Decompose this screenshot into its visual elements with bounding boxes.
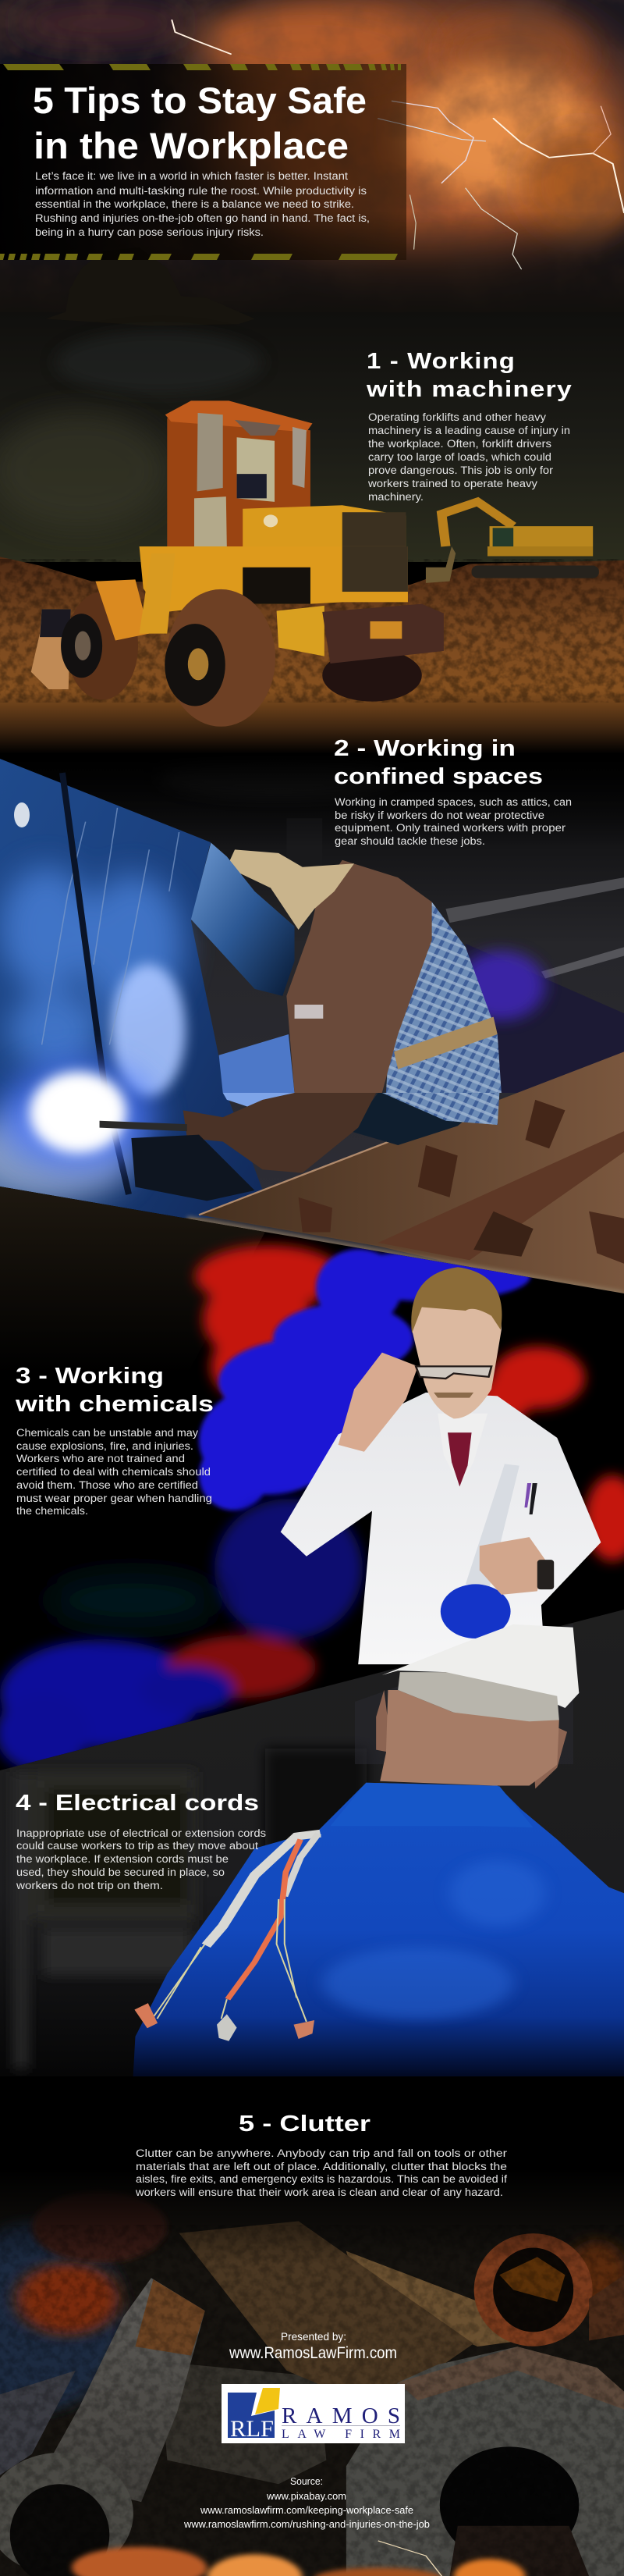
heading: section 3: with chemicals <box>15 1392 214 1417</box>
logo: Ramos Law Firm <box>222 2384 405 2443</box>
metal texture <box>0 2225 624 2576</box>
jacket highlights <box>322 1860 545 2019</box>
intro text: information and multi-tasking rule the roost. While productivity is <box>35 185 367 197</box>
text: section 4: workers do not trip on them. <box>16 1880 163 1891</box>
heading: section 1 <box>366 349 573 402</box>
hat band <box>398 1672 559 1721</box>
intro text <box>35 170 370 238</box>
text: section 1: Operating forklifts and other heavy <box>368 411 546 423</box>
text: section 1: prove dangerous. This job is only for <box>368 464 554 476</box>
panel: electrical background <box>0 1608 624 2123</box>
intro text: being in a hurry can pose serious injury risks. <box>35 226 264 238</box>
illustration: wheel loader <box>31 400 444 727</box>
hazard stripes bottom <box>0 254 398 260</box>
title: in the Workplace <box>34 125 349 166</box>
jacket <box>131 1783 624 2108</box>
text: section 1: carry too large of loads, which could <box>368 451 551 463</box>
dark smoke lower <box>0 1499 363 1772</box>
right big wrench <box>346 2347 624 2576</box>
connectors <box>134 2003 158 2028</box>
panel: intro <box>0 64 406 260</box>
text: section 1: the workplace. Often, forklift drivers <box>368 438 551 450</box>
text: section 1 <box>367 411 570 503</box>
text: section 3: cause explosions, fire, and injuries. <box>16 1440 193 1452</box>
centre handle <box>179 2221 473 2410</box>
hand with flask <box>480 1537 545 1595</box>
background: dark water <box>0 312 624 562</box>
violet wedge and steel parts <box>458 944 624 1093</box>
illustration: excavator <box>426 502 599 583</box>
text: sources <box>183 2475 430 2530</box>
loader body <box>31 546 444 727</box>
watch <box>537 1560 554 1589</box>
flask <box>441 1584 511 1638</box>
panel: black band and workshop background <box>115 777 624 1266</box>
ears <box>376 1690 567 1788</box>
title: 5 Tips to Stay Safe <box>33 80 367 121</box>
ring wrench <box>484 2240 583 2339</box>
text: section 4: the workplace. If extension cords must be <box>16 1853 229 1865</box>
steel plate with smoke <box>0 759 273 1218</box>
illustration: scientist <box>281 1267 601 1664</box>
text: section 4: Inappropriate use of electrical or extension cords <box>16 1827 266 1839</box>
text: section 5: Clutter can be anywhere. Anybody can trip and fall on tools or other <box>136 2147 508 2159</box>
text: section 1: machinery. <box>368 491 424 503</box>
raised arm and hand <box>339 1353 418 1452</box>
edge highlight <box>187 1219 624 1293</box>
welder <box>100 842 502 1201</box>
text: section 2: equipment. Only trained workers with proper <box>335 822 566 834</box>
text: section 5 <box>135 2147 508 2198</box>
panel: wrenches background <box>0 2076 624 2576</box>
thick white cord <box>206 1834 321 1945</box>
text: section 4: could cause workers to trip as they move about <box>16 1840 258 1852</box>
lab coat <box>281 1393 601 1664</box>
text: section 3: must wear proper gear when handling <box>16 1493 212 1504</box>
shirt and tie <box>438 1414 488 1486</box>
icon: lightning bolts <box>172 20 624 269</box>
strap wrench <box>346 2251 511 2347</box>
wires <box>153 1899 307 2022</box>
red smoke <box>195 1245 624 1561</box>
text: section 3: Chemicals can be unstable and may <box>16 1427 198 1439</box>
text: presented by <box>229 2330 397 2362</box>
illustration: ground and soil <box>0 557 624 754</box>
text: section 4: used, they should be secured in place, so <box>16 1866 225 1878</box>
intro text: Rushing and injuries on-the-job often go hand in hand. The fact is, <box>35 212 370 224</box>
text: section 2 <box>335 796 572 847</box>
heading: section 2 <box>334 736 543 789</box>
panel: chemicals background <box>0 1171 624 1795</box>
text: section 1: workers trained to operate heavy <box>367 478 537 489</box>
intro text: essential in the workplace, there is a balance we need to strike. <box>35 198 354 210</box>
icon: island silhouette <box>0 247 263 530</box>
text: presented by: www.RamosLawFirm.com <box>229 2344 397 2362</box>
text: sources: Source: <box>290 2475 323 2487</box>
left wrench <box>40 2278 205 2502</box>
glasses <box>416 1366 491 1379</box>
illustration: welding scene <box>0 759 624 1302</box>
loader cab <box>165 400 406 546</box>
text: section 3: Workers who are not trained and <box>16 1453 185 1464</box>
hazard stripes <box>3 64 401 70</box>
orange clouds <box>72 2547 525 2576</box>
steel beams <box>199 1051 624 1302</box>
lower centre wrench <box>159 2361 326 2484</box>
pens <box>524 1483 531 1507</box>
text: section 5: workers will ensure that their work area is clean and clear of any hazard. <box>135 2186 503 2198</box>
heading: section 4: 4 - Electrical cords <box>16 1791 259 1816</box>
flask neck <box>466 1464 519 1588</box>
heading: section 5: 5 - Clutter <box>239 2112 370 2137</box>
background: storm sky <box>0 0 624 328</box>
intro text: Let’s face it: we live in a world in which faster is better. Instant <box>35 170 348 182</box>
text: section 5: materials that are left out of place. Additionally, clutter that blocks the <box>136 2161 507 2172</box>
heading: section 3: 3 - Working <box>16 1364 164 1389</box>
text: section 2: Working in cramped spaces, such as attics, can <box>335 796 572 808</box>
text: section 4 <box>16 1827 266 1891</box>
logo: Ramos Law Firm: RLF <box>230 2416 274 2442</box>
blue smoke <box>199 1249 530 1510</box>
hard hat <box>382 1624 579 1708</box>
heading: section 1: 1 - Working <box>367 349 516 374</box>
orange cord <box>228 1839 300 1999</box>
text: sources: www.ramoslawfirm.com/rushing-and-injuries-on-the-job <box>183 2518 430 2530</box>
head <box>412 1307 502 1419</box>
text: section 3 <box>16 1427 212 1517</box>
logo: Ramos Law Firm: RAMOS <box>282 2403 400 2428</box>
heading: section 2: confined spaces <box>334 764 543 789</box>
moustache <box>434 1393 473 1398</box>
text: section 3: the chemicals. <box>16 1505 88 1517</box>
text: section 2: gear should tackle these jobs. <box>335 835 485 847</box>
thin white cord <box>285 1834 318 1896</box>
text: sources: www.ramoslawfirm.com/keeping-workplace-safe <box>200 2504 413 2516</box>
illustration: worker with electrical cords <box>131 1624 624 2108</box>
text: section 1: machinery is a leading cause of injury in <box>368 425 570 436</box>
heading: section 1: with machinery <box>366 377 573 402</box>
text: presented by: Presented by: <box>281 2330 346 2343</box>
text: sources: www.pixabay.com <box>266 2490 346 2502</box>
text: section 3: avoid them. Those who are certified <box>16 1479 198 1491</box>
head and neck <box>380 1690 559 1786</box>
text: section 3: certified to deal with chemicals should <box>16 1466 211 1478</box>
text: section 2: be risky if workers do not wear protective <box>335 809 544 821</box>
title <box>33 80 367 166</box>
hair <box>411 1267 502 1333</box>
heading: section 3 <box>15 1364 214 1417</box>
heading: section 2: 2 - Working in <box>334 736 516 761</box>
hair <box>445 1672 539 1698</box>
collar <box>330 1783 534 1827</box>
arc flash <box>0 1062 156 1171</box>
logo: Ramos Law Firm: LAW FIRM <box>282 2428 400 2441</box>
text: section 5: aisles, fire exits, and emergency exits is hazardous. This can be avoided if <box>136 2173 507 2185</box>
